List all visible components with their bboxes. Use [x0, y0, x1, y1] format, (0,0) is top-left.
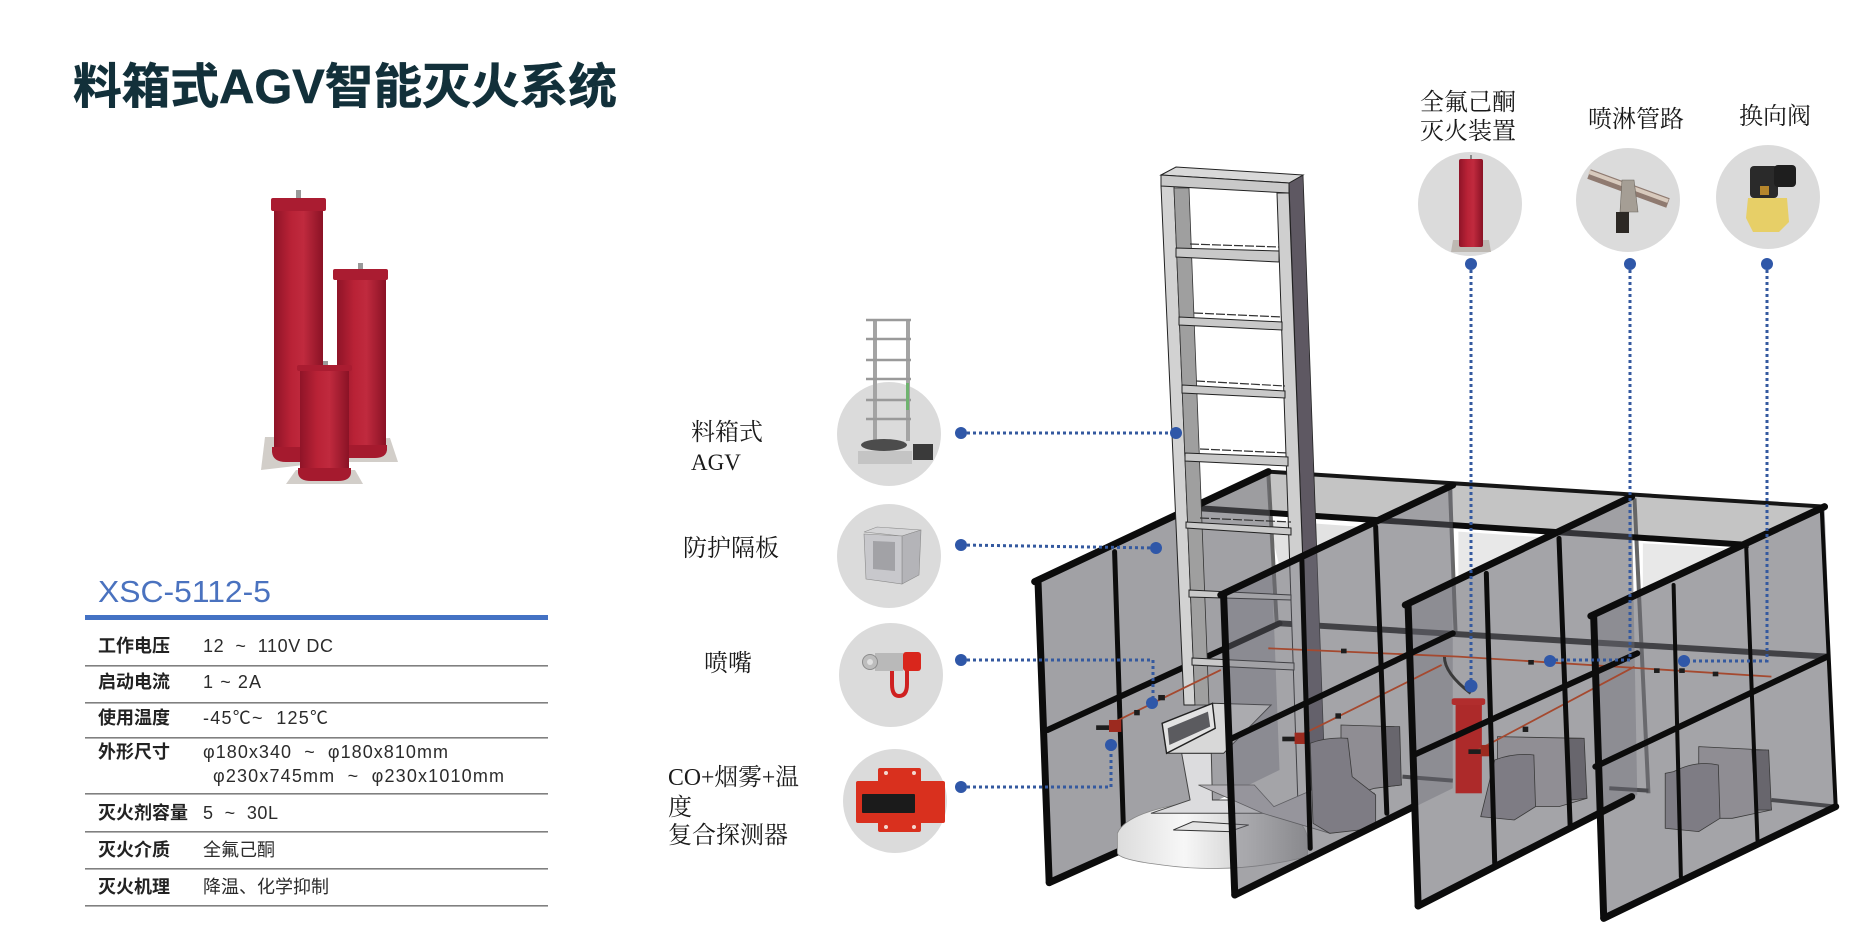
- leader dots: [955, 539, 1162, 554]
- fence walls 2 to 4 with tanks, pipes and cylinder: [1096, 485, 1836, 918]
- row: voltage: 12 ~ 110V DC: [203, 636, 333, 656]
- row: current: [85, 668, 548, 704]
- row: medium: 全氟己酮: [203, 840, 275, 860]
- label: 复合探测器: [668, 822, 788, 849]
- row: medium: 灭火介质: [98, 836, 170, 862]
- label: 料箱式: [691, 419, 763, 446]
- spray pipe network: [1112, 648, 1771, 750]
- label: [1420, 89, 1516, 145]
- leader line: [1684, 264, 1767, 661]
- label: [668, 764, 799, 849]
- label: AGV: [691, 450, 741, 475]
- row: temperature: -45℃~ 125℃: [203, 708, 328, 728]
- label: 喷嘴: [704, 650, 752, 677]
- AGV tray: [1168, 703, 1271, 753]
- foam tanks: [1310, 725, 1771, 833]
- model heading: XSC-5112-5: [98, 574, 271, 609]
- black frame members: [1221, 485, 1836, 918]
- circle thumbnail: cylinder: [1418, 152, 1522, 256]
- label: CO+烟雾+温: [668, 764, 799, 791]
- row: agent capacity: [85, 799, 548, 833]
- row: dimensions: φ180x340 ~ φ180x810mm: [203, 742, 448, 762]
- label: [691, 419, 763, 475]
- row: dimensions: 外形尺寸: [98, 738, 170, 764]
- callout: 喷淋管路: [1544, 106, 1684, 667]
- row: voltage: 工作电压: [98, 632, 170, 658]
- callout: 复合探测器: [668, 739, 1117, 853]
- row: current: 启动电流: [98, 668, 170, 694]
- leader dots: [955, 739, 1117, 793]
- row: temperature: 使用温度: [98, 704, 170, 730]
- red cylinder: [1444, 657, 1485, 793]
- circle thumbnail: solenoid valve: [1716, 145, 1820, 249]
- row: temperature: [85, 704, 548, 739]
- circle thumbnail: AGV robot: [837, 320, 941, 486]
- title: 料箱式AGV智能灭火系统: [73, 61, 617, 114]
- row: agent capacity: 灭火剂容量: [98, 799, 188, 825]
- label: 换向阀: [1739, 103, 1811, 130]
- row: voltage: [85, 632, 548, 667]
- circle thumbnail: partition frame: [837, 504, 941, 608]
- row: mechanism: 降温、化学抑制: [203, 877, 329, 897]
- row: dimensions: φ230x745mm ~ φ230x1010mm: [213, 766, 504, 786]
- label: 喷淋管路: [1588, 106, 1684, 133]
- callout: 喷嘴: [704, 623, 1158, 727]
- callout: 全氟己酮灭火装置: [1418, 89, 1522, 692]
- label: 灭火装置: [1420, 118, 1516, 145]
- leader line: [961, 660, 1153, 703]
- AGV ladder rack: [1161, 167, 1326, 805]
- leader dots: [1544, 258, 1636, 667]
- product photo: three red extinguisher cylinders: [261, 190, 398, 484]
- circle thumbnail: pipe and sprinkler: [1576, 148, 1680, 252]
- heading rule: [85, 615, 548, 620]
- circle thumbnail: nozzle: [839, 623, 943, 727]
- leader line: [961, 745, 1111, 787]
- leader dots: [955, 427, 1182, 439]
- leader dots: [1678, 258, 1773, 667]
- label: 防护隔板: [683, 535, 779, 562]
- nozzles: [1096, 649, 1718, 754]
- rungs: [1176, 248, 1294, 670]
- leader dots: [1464, 258, 1478, 692]
- label: 全氟己酮: [1420, 89, 1516, 116]
- AGV chassis disc: [1117, 803, 1307, 868]
- label: 度: [668, 794, 692, 821]
- row: current: 1 ~ 2A: [203, 672, 261, 692]
- row: agent capacity: 5 ~ 30L: [203, 803, 278, 823]
- leader dots: [955, 654, 1158, 709]
- AGV base, tray and body: [1117, 703, 1375, 868]
- row: dimensions: [85, 738, 548, 795]
- row: mechanism: 灭火机理: [98, 873, 170, 899]
- spec table: [85, 574, 548, 907]
- fence and AGV scene: [1035, 167, 1836, 918]
- row: mechanism: [85, 873, 548, 907]
- leader line: [1470, 264, 1472, 686]
- leader line: [961, 432, 1176, 434]
- callout: 防护隔板: [683, 504, 1162, 608]
- fence back structure and first wall: [1035, 472, 1836, 918]
- row: medium: [85, 836, 548, 870]
- circle thumbnail: detector: [843, 749, 947, 853]
- callout: 换向阀: [1678, 103, 1820, 667]
- AGV column: [1151, 753, 1263, 813]
- leader line: [961, 545, 1156, 548]
- callout: 料箱式AGV: [691, 320, 1182, 486]
- leader line: [1550, 264, 1630, 660]
